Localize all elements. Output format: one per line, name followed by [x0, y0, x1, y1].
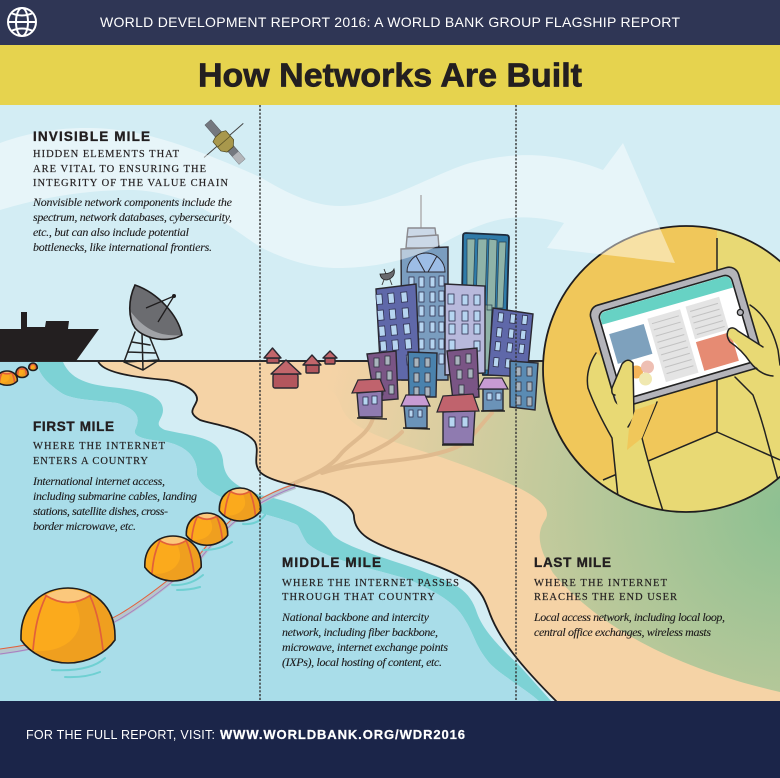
tablet	[588, 265, 765, 409]
horizon line	[0, 360, 548, 362]
subheading	[282, 578, 459, 603]
land and sea scene	[0, 361, 780, 702]
description: spectrum, network databases, cybersecurity,	[33, 210, 232, 224]
right thumb	[726, 327, 774, 377]
hut 3	[303, 355, 321, 373]
subheading	[33, 149, 228, 189]
heading: MIDDLE MILE	[282, 555, 381, 570]
description: bottlenecks, like international frontiers.	[33, 240, 212, 254]
description: (IXPs), local hosting of content, etc.	[282, 655, 442, 669]
main title: How Networks Are Built	[198, 56, 582, 94]
buoy 1	[21, 588, 115, 663]
footer url: WWW.WORLDBANK.ORG/WDR2016	[220, 727, 465, 742]
text: last mile	[533, 555, 725, 639]
swoosh arrow from sky to inset	[0, 128, 675, 268]
subheading	[534, 578, 677, 603]
description	[32, 195, 233, 254]
blue block centre	[408, 352, 437, 397]
coastline	[98, 361, 557, 702]
description: International internet access,	[32, 474, 165, 488]
green inland gradient	[225, 361, 780, 692]
shallow water	[0, 361, 557, 702]
city buildings	[352, 195, 538, 445]
section divider lines	[260, 105, 516, 701]
submarine cable	[0, 484, 295, 654]
roads	[290, 413, 492, 485]
title band	[0, 45, 780, 105]
subheading: HIDDEN ELEMENTS THAT	[33, 149, 180, 160]
antenna	[420, 195, 422, 229]
subheading: WHERE THE INTERNET PASSES	[282, 578, 459, 589]
text: middle mile	[281, 555, 459, 669]
description: microwave, internet exchange points	[282, 640, 448, 654]
buoys / landing stations	[0, 363, 265, 677]
orange back wall	[544, 227, 717, 480]
icon: ship silhouette	[0, 312, 99, 361]
left purple tower	[376, 284, 420, 380]
subheading: INTEGRITY OF THE VALUE CHAIN	[33, 178, 228, 189]
teal shoreline band	[37, 362, 552, 702]
dark purple block right	[447, 348, 479, 400]
dark purple block left	[367, 351, 398, 401]
buoy 2	[145, 536, 201, 581]
deep water	[0, 361, 540, 702]
buoy 4	[219, 488, 261, 521]
left thumb	[611, 360, 634, 427]
right purple tower	[488, 308, 533, 377]
subheading: WHERE THE INTERNET	[33, 441, 166, 452]
subheading: ARE VITAL TO ENSURING THE	[33, 164, 206, 175]
right fingers and forearm	[735, 305, 780, 480]
blue block right	[510, 361, 538, 410]
small far buoys	[0, 363, 37, 385]
room lines	[603, 238, 780, 480]
icon: satellite dish	[124, 285, 182, 370]
heading: FIRST MILE	[33, 419, 114, 434]
description: including submarine cables, landing	[33, 489, 197, 503]
round inset: user with tablet	[542, 225, 780, 513]
description: National backbone and intercity	[281, 610, 430, 624]
subheading: THROUGH THAT COUNTRY	[282, 592, 435, 603]
heading: INVISIBLE MILE	[33, 129, 150, 144]
subheading: WHERE THE INTERNET	[534, 578, 668, 589]
inset background	[543, 226, 780, 512]
left forearm	[588, 354, 659, 476]
inset outline	[543, 226, 780, 512]
description: stations, satellite dishes, cross-	[33, 504, 168, 518]
description	[281, 610, 448, 669]
description: Nonvisible network components include the	[32, 195, 233, 209]
text: invisible mile	[32, 129, 233, 254]
house 2	[401, 395, 430, 429]
text: first mile	[32, 419, 197, 533]
subheading: ENTERS A COUNTRY	[33, 456, 148, 467]
banner title: WORLD DEVELOPMENT REPORT 2016: A WORLD BANK GROUP FLAGSHIP REPORT	[100, 14, 680, 30]
buoy 3	[186, 513, 228, 545]
description: etc., but can also include potential	[33, 225, 190, 239]
description	[32, 474, 197, 533]
icon: World Bank globe	[8, 8, 36, 36]
hut 4	[323, 351, 337, 364]
water ripples	[52, 515, 265, 677]
app circles	[634, 366, 643, 378]
hut 1	[264, 348, 281, 363]
description: border microwave, etc.	[33, 519, 136, 533]
house 3	[437, 394, 479, 445]
footer	[0, 701, 780, 778]
description: central office exchanges, wireless masts	[534, 625, 711, 639]
top banner	[0, 0, 780, 45]
lavender tower	[445, 284, 485, 375]
subheading	[33, 441, 166, 467]
house 4	[478, 378, 508, 411]
wall gap near wrist	[627, 403, 656, 450]
subheading: REACHES THE END USER	[534, 592, 677, 603]
house 1	[352, 379, 387, 419]
main domed tower	[401, 247, 448, 380]
sky background	[0, 105, 780, 362]
village huts	[264, 348, 337, 388]
tower top tiers	[406, 228, 439, 248]
hut 2	[271, 360, 301, 388]
description: network, including fiber backbone,	[282, 625, 438, 639]
description: Local access network, including local loop,	[533, 610, 725, 624]
heading: LAST MILE	[534, 555, 611, 570]
sand land	[0, 361, 780, 702]
rooftop dish	[380, 269, 394, 285]
blue glass tower	[462, 233, 509, 375]
footer lead-in: FOR THE FULL REPORT, VISIT:	[26, 728, 215, 742]
description	[533, 610, 725, 639]
icon: satellite	[188, 105, 262, 179]
